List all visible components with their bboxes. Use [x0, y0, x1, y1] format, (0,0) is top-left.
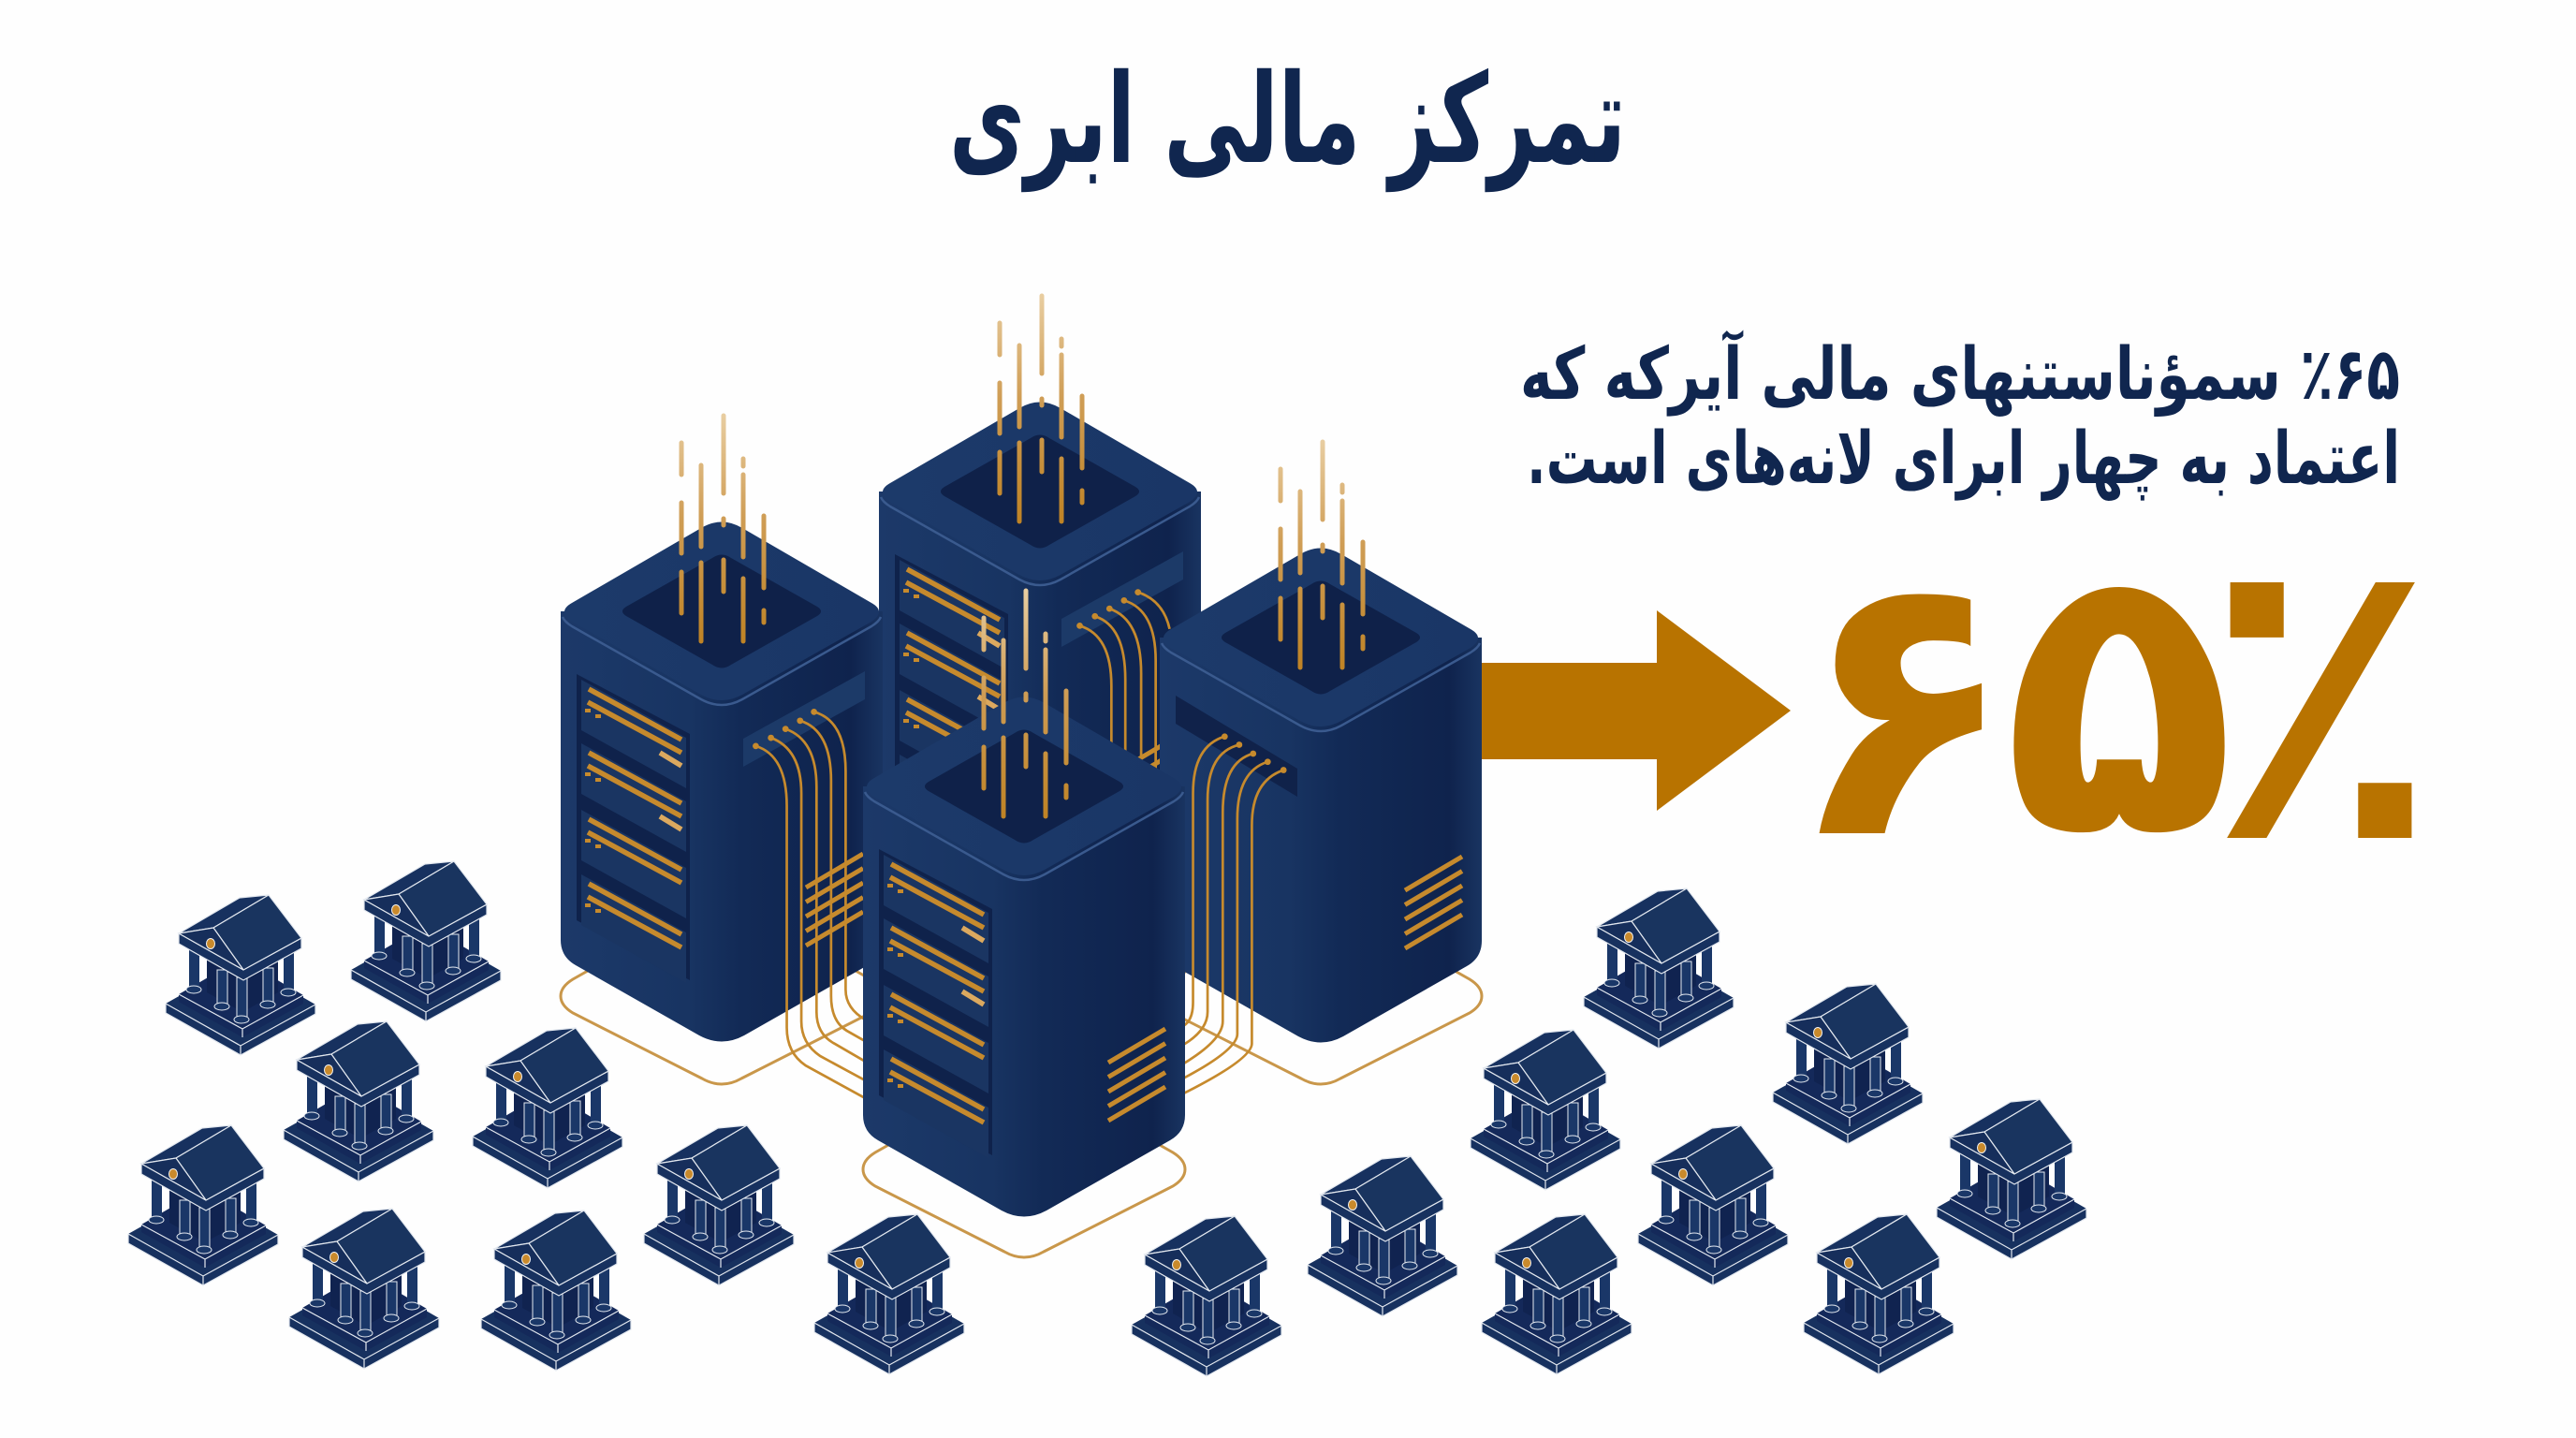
bank 13 — [1471, 1030, 1620, 1190]
big number 65%: ۵ — [2002, 480, 2236, 919]
cables: right tower — [1182, 733, 1287, 1094]
server: left tower — [561, 416, 883, 1098]
bank 9 — [814, 1214, 964, 1374]
bank 8 — [644, 1125, 794, 1285]
big number 65%: ٪ — [2202, 465, 2440, 933]
bank icons: left cluster — [128, 861, 964, 1374]
bank 2 — [351, 861, 501, 1021]
bank 5 — [128, 1125, 278, 1285]
bank 12 — [1482, 1214, 1632, 1374]
server: front tower — [863, 591, 1185, 1217]
bank 4 — [473, 1028, 622, 1188]
text block: description: ٪۶۵ سمؤناستنهای مالی آیرکه که — [1520, 330, 2400, 417]
bank icons: right cluster — [1132, 888, 2086, 1376]
bank 14 — [1638, 1125, 1788, 1285]
title: تمرکز مالی ابری — [949, 48, 1626, 192]
bank 1 — [166, 895, 315, 1055]
bank 15 — [1804, 1214, 1954, 1374]
server: back tower — [879, 296, 1201, 921]
bank 18 — [1584, 888, 1734, 1049]
big number 65%: ۶ — [1787, 490, 2018, 921]
floor outlines under servers — [561, 902, 1482, 1257]
bank 6 — [289, 1209, 439, 1369]
cables: left tower — [753, 709, 866, 1098]
bank 17 — [1937, 1099, 2086, 1259]
text block: description — [1520, 330, 2400, 501]
big number 65% — [1787, 465, 2440, 933]
bank 10 — [1132, 1216, 1281, 1376]
bank 3 — [284, 1021, 433, 1181]
bank 7 — [481, 1211, 631, 1371]
server: right tower — [1160, 442, 1482, 1094]
bank 11 — [1308, 1156, 1457, 1316]
cables: back tower — [1076, 589, 1170, 769]
bank 16 — [1773, 984, 1923, 1144]
arrow — [1482, 610, 1791, 811]
